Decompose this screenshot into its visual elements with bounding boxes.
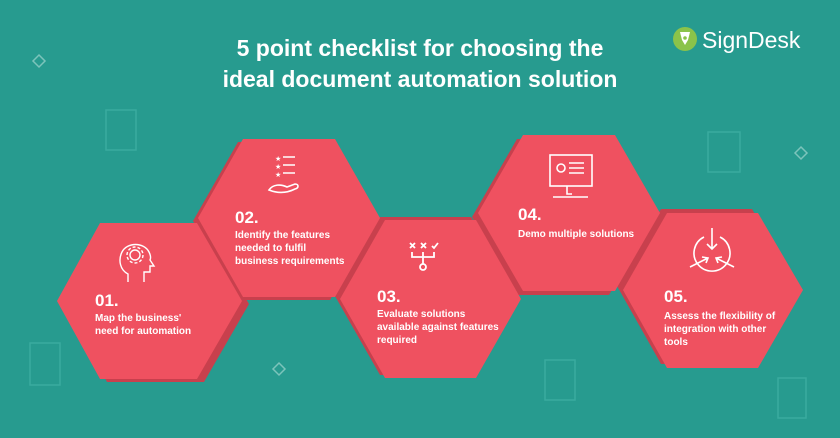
panel: step 02: needed to fulfil: [235, 243, 306, 254]
title: 5 point checklist for choosing the: [237, 35, 603, 61]
panel: step 01: 01.: [95, 291, 119, 310]
icon: star list on hand: ★: [275, 155, 281, 163]
panel: step 03: available against features: [377, 322, 499, 333]
icon: star list on hand: [269, 155, 298, 193]
hexagon shadows: [64, 139, 797, 382]
panel: step 03: 03.: [377, 287, 401, 306]
icon: x x check diagram: [410, 243, 438, 270]
panel: step 04: [478, 135, 660, 291]
panel: step 03: Evaluate solutions: [377, 309, 466, 320]
panel: step 02: Identify the features: [235, 230, 330, 241]
panel: step 05: Assess the flexibility of: [664, 311, 776, 322]
icon: star list on hand: ★: [275, 163, 281, 171]
panel: step 04: Demo multiple solutions: [518, 229, 635, 240]
panel: step 05: [623, 213, 803, 368]
title: [223, 35, 617, 92]
logo: SignDesk: SignDesk: [702, 27, 801, 53]
panel: step 03: required: [377, 335, 417, 346]
icon: monitor: [550, 155, 592, 197]
icon: converging arrows: [690, 228, 734, 271]
panel: step 04: 04.: [518, 205, 542, 224]
panel: step 01: [57, 223, 242, 379]
panel: step 02: business requirements: [235, 256, 345, 267]
panel: step 01: need for automation: [95, 326, 191, 337]
panel: step 02: 02.: [235, 208, 259, 227]
panel: step 03: [340, 220, 521, 378]
panel: step 05: integration with other: [664, 324, 766, 335]
icon: star list on hand: ★: [275, 171, 281, 179]
icon: head with gear: [120, 244, 154, 282]
panel: step 05: 05.: [664, 287, 688, 306]
panel: step 02: [198, 139, 380, 297]
title: ideal document automation solution: [223, 66, 617, 92]
panel: step 01: Map the business': [95, 313, 181, 324]
panel: step 05: tools: [664, 337, 688, 348]
